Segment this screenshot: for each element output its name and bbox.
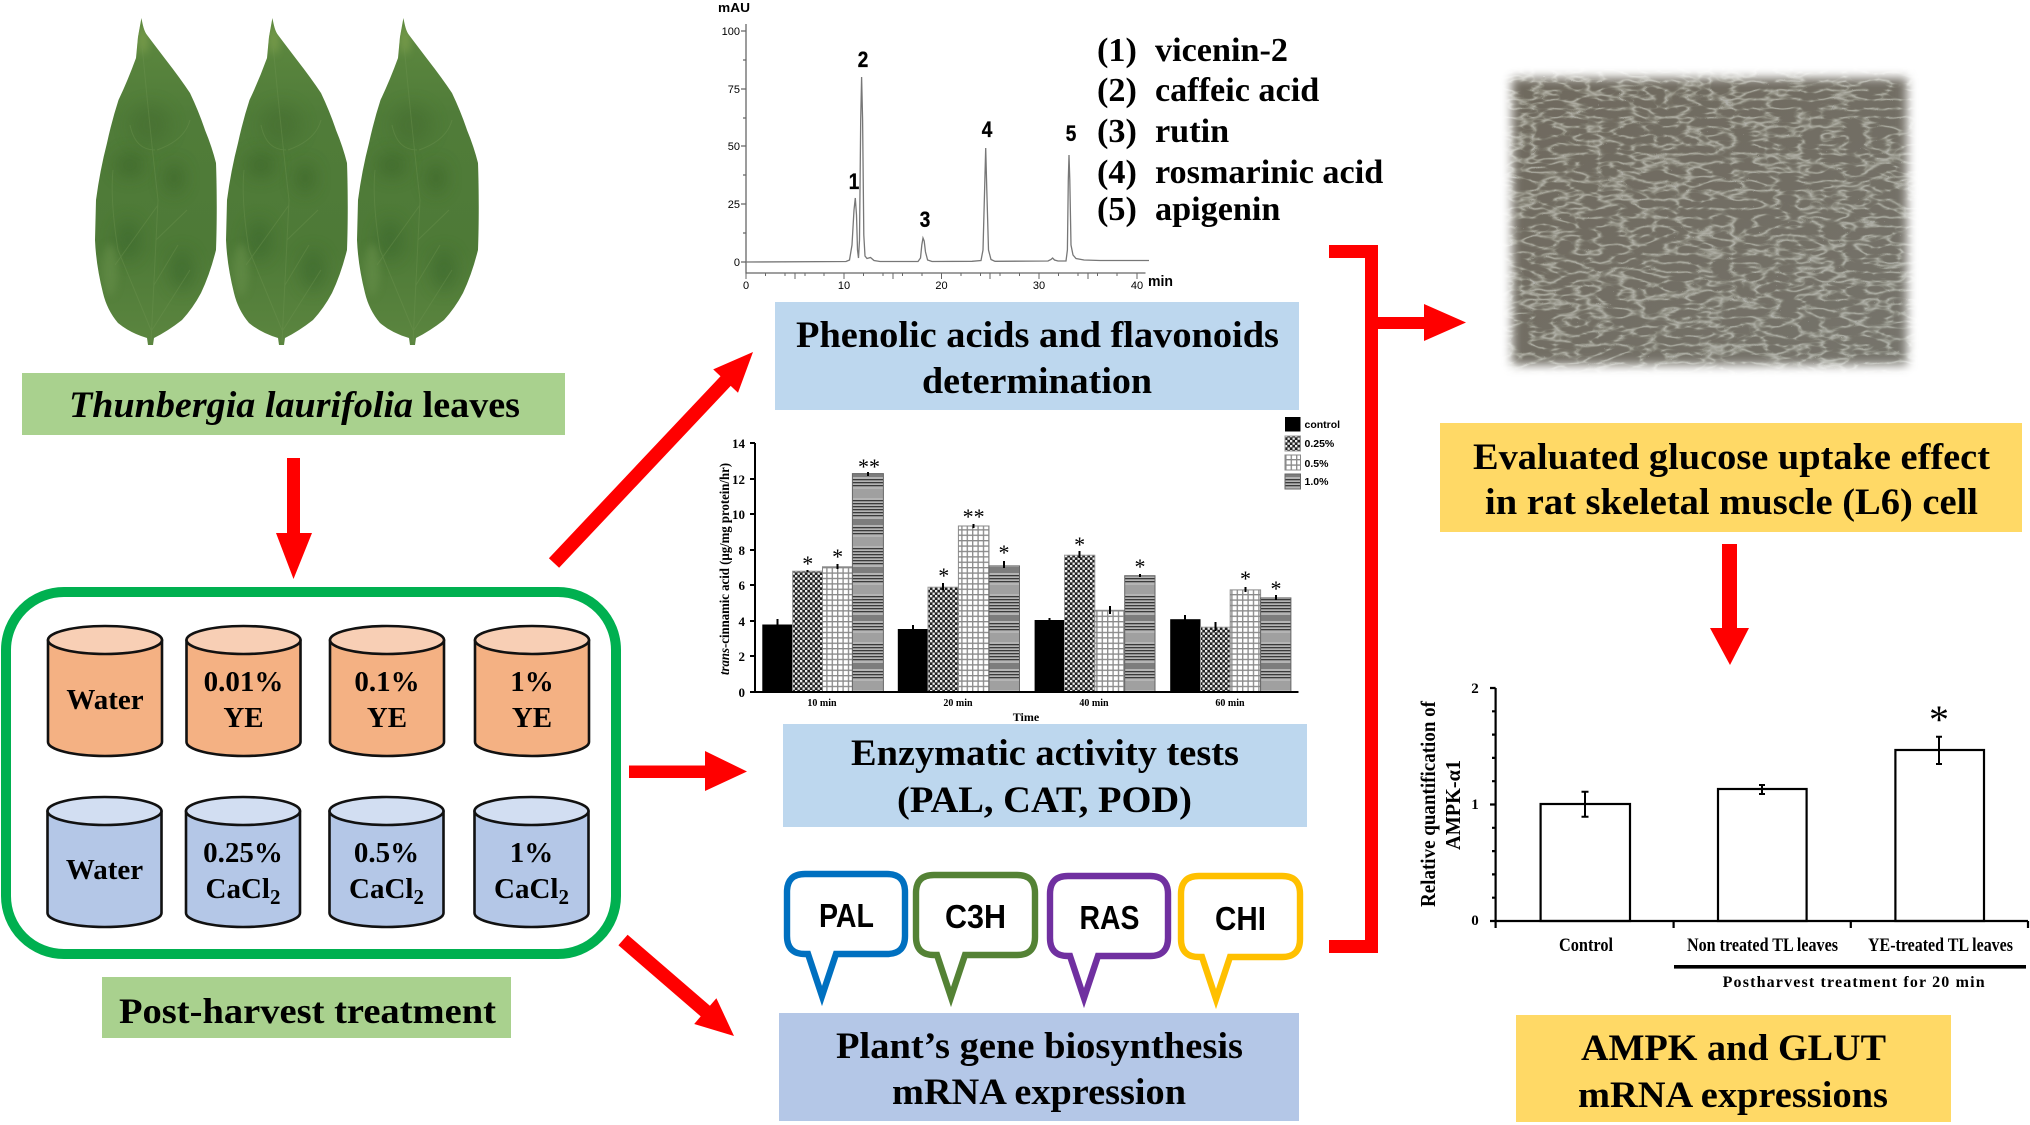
significance stars: * (998, 540, 1010, 565)
legend (1285, 417, 1340, 489)
y axis title: AMPK-α1 (1441, 760, 1465, 850)
container: water blue (48, 797, 162, 927)
x axis labels: Non treated TL leaves (1687, 935, 1838, 956)
chromatogram peak numbers (849, 48, 1076, 232)
container: 1% CaCl2: 1% (510, 837, 553, 869)
x axis labels: 40 min (1079, 698, 1109, 709)
leaves photo (90, 15, 482, 350)
y axis numbers: 14 (732, 436, 746, 451)
x axis labels (807, 698, 1245, 709)
error bars (1582, 737, 1942, 817)
compound list: (3) (1097, 113, 1137, 150)
compound list: vicenin-2 (1155, 32, 1288, 69)
bars (1541, 750, 1984, 921)
x axis title: Time (1013, 710, 1040, 724)
container: 0.01% YE: YE (223, 702, 264, 734)
label: plant gene biosynthesis mRNA expression (779, 1013, 1299, 1121)
y axis numbers: 6 (738, 578, 746, 593)
chromatogram axis labels: 20 (935, 280, 948, 292)
label: Thunbergia laurifolia leaves: Thunbergia laurifolia leaves (69, 385, 520, 426)
container: 1% YE: YE (512, 702, 552, 734)
speech bubble: PAL (787, 874, 905, 996)
x axis labels: 60 min (1215, 698, 1245, 709)
chromatogram axis labels: 75 (728, 84, 740, 96)
significance stars: * (832, 544, 843, 569)
y axis title: trans-cinnamic acid (µg/mg protein/hr) (718, 463, 733, 675)
significance stars: * (1134, 554, 1146, 579)
container: 1% CaCl2: CaCl (494, 873, 558, 905)
legend: 1.0% (1304, 476, 1329, 488)
chromatogram peak numbers: 5 (1066, 122, 1076, 146)
chromatogram peak numbers: 4 (982, 118, 993, 142)
label: evaluated glucose uptake (1440, 423, 2022, 532)
speech bubble: CHI: CHI (1215, 900, 1266, 937)
arrow: glucose uptake to AMPK chart (1710, 544, 1749, 665)
speech bubble: CHI (1181, 876, 1300, 999)
chromatogram axis labels: 100 (722, 26, 740, 38)
treatment group label: Postharvest treatment for 20 min (1723, 974, 1985, 991)
bracket: combining results (1329, 245, 1378, 953)
label: phenolic acids and flavonoids determination (775, 302, 1299, 410)
chromatogram peak numbers: 3 (920, 208, 930, 232)
significance stars (802, 454, 1282, 601)
label: AMPK and GLUT mRNA expressions (1516, 1015, 1951, 1122)
compound list: (4) (1097, 154, 1137, 191)
significance stars: * (938, 563, 949, 588)
chart: trans-cinnamic acid bar chart (718, 417, 1340, 724)
compound list: (5) (1097, 191, 1137, 228)
compound list: (1) (1097, 32, 1137, 69)
y axis numbers: 0 (738, 685, 745, 700)
label: enzymatic activity tests: (PAL, CAT, POD) (897, 780, 1192, 821)
0.5% bars (822, 526, 1261, 692)
significance stars: ** (858, 454, 880, 479)
container: 0.25% CaCl2 (186, 797, 300, 927)
compound list: apigenin (1155, 191, 1280, 228)
x axis labels: Control (1559, 935, 1613, 956)
arrow: bracket to cell image (1378, 304, 1466, 341)
arrow: treatment to gene biosynthesis (618, 935, 734, 1036)
label: AMPK and GLUT mRNA expressions: AMPK and GLUT (1581, 1028, 1886, 1069)
label: phenolic acids and flavonoids determination: determination (922, 361, 1152, 402)
label: phenolic acids and flavonoids determination: Phenolic acids and flavonoids (796, 315, 1279, 356)
significance stars: * (1240, 566, 1251, 591)
chromatogram axis labels: 10 (838, 280, 850, 292)
y axis numbers: 12 (732, 472, 745, 487)
error bars (778, 472, 1276, 631)
y axis numbers: 10 (732, 507, 745, 522)
container: 0.1% YE: 0.1% (354, 666, 420, 698)
axes (1490, 688, 2028, 928)
y axis title: Relative quantification of (1416, 700, 1440, 907)
chart: AMPK-alpha1 relative quantification (1416, 681, 2028, 991)
label: post-harvest treatment: Post-harvest treatment (119, 991, 496, 1031)
significance star: * (1929, 697, 1949, 742)
chromatogram axis labels: 30 (1033, 280, 1045, 292)
compound list: rosmarinic acid (1155, 154, 1383, 191)
legend: control (1304, 419, 1340, 431)
container: 0.5% CaCl2 (330, 797, 444, 927)
label: enzymatic activity tests: Enzymatic activity tests (851, 733, 1239, 774)
y axis numbers (1471, 681, 1479, 929)
label: AMPK and GLUT mRNA expressions: mRNA expressions (1578, 1075, 1888, 1116)
y axis numbers: 1 (1471, 797, 1479, 813)
significance stars: * (1270, 576, 1282, 601)
label: plant gene biosynthesis mRNA expression: Plant’s gene biosynthesis (836, 1026, 1243, 1067)
chromatogram axis labels: 40 (1131, 280, 1143, 292)
1.0% bars (852, 474, 1291, 692)
chromatogram axis labels: min (1148, 273, 1173, 290)
y axis numbers: 2 (738, 649, 745, 664)
chromatogram axis labels (718, 0, 1173, 292)
0.25% bars (793, 555, 1230, 692)
speech bubble: RAS (1050, 876, 1168, 998)
significance stars: * (802, 551, 813, 576)
label: post-harvest treatment (102, 977, 511, 1038)
chromatogram peak numbers: 1 (849, 170, 859, 194)
container: 0.01% YE (186, 626, 300, 756)
compound list: (2) (1097, 72, 1137, 109)
compound list: caffeic acid (1155, 72, 1319, 109)
label: plant gene biosynthesis mRNA expression: mRNA expression (892, 1072, 1186, 1113)
container: 0.25% CaCl2: CaCl (206, 873, 270, 905)
container: 0.5% CaCl2: 0.5% (354, 837, 419, 869)
arrow: treatment to phenolic (549, 352, 753, 568)
chromatogram axis labels: 0 (743, 280, 749, 292)
chromatogram axis labels: 0 (734, 257, 740, 269)
container: 0.5% CaCl2: CaCl (349, 873, 413, 905)
chromatogram axis labels: mAU (718, 0, 750, 15)
chart: HPLC chromatogram (718, 0, 1173, 292)
compound list: rutin (1155, 113, 1229, 150)
label: enzymatic activity tests (783, 724, 1307, 827)
y axis numbers (732, 436, 746, 700)
axes (750, 443, 1298, 692)
y axis numbers: 8 (738, 543, 746, 558)
arrow: treatment to enzymatic (629, 751, 747, 791)
speech bubble: RAS: RAS (1080, 899, 1140, 936)
container: water blue: Water (66, 854, 143, 886)
x axis labels: 10 min (807, 698, 837, 709)
legend: 0.25% (1304, 438, 1335, 450)
chromatogram peak numbers: 2 (858, 48, 868, 72)
x axis labels (1559, 935, 2013, 956)
chromatogram axis labels: 25 (728, 199, 740, 211)
container: 1% CaCl2: 2 (558, 885, 569, 909)
label: evaluated glucose uptake: Evaluated glucose uptake effect (1473, 437, 1991, 478)
speech bubble: PAL: PAL (819, 897, 874, 934)
container: 0.5% CaCl2: 2 (413, 885, 424, 909)
legend: 0.5% (1304, 458, 1329, 470)
speech bubble: C3H (916, 875, 1035, 997)
significance stars: ** (963, 504, 985, 529)
container: 1% CaCl2 (474, 797, 588, 927)
container: 0.25% CaCl2: 2 (270, 885, 280, 909)
treatment group rule (1674, 965, 2026, 969)
arrow: leaves to treatment (276, 458, 312, 579)
y axis numbers: 4 (738, 614, 746, 629)
container: water orange: Water (66, 684, 144, 716)
label: evaluated glucose uptake: in rat skeletal muscle (L6) cell (1485, 482, 1978, 523)
significance stars: * (1074, 532, 1085, 557)
speech bubble: C3H: C3H (945, 898, 1006, 935)
container: 0.1% YE (330, 626, 444, 756)
container: 0.25% CaCl2: 0.25% (203, 837, 283, 869)
compound list (1097, 32, 1383, 228)
y axis numbers: 0 (1471, 913, 1479, 929)
y axis numbers: 2 (1471, 681, 1479, 697)
x axis labels: 20 min (943, 698, 973, 709)
container: 1% YE (475, 626, 589, 756)
label: Thunbergia laurifolia leaves (22, 373, 565, 435)
panel: post-harvest treatment containers (6, 592, 616, 954)
container: 1% YE: 1% (510, 666, 554, 698)
control bars (762, 619, 1200, 692)
chromatogram axis labels: 50 (728, 141, 740, 153)
container: water orange (48, 626, 162, 756)
container: 0.01% YE: 0.01% (204, 666, 283, 698)
y axis title (1416, 700, 1465, 907)
image: L6 skeletal muscle cells micrograph (1504, 70, 1915, 372)
container: 0.1% YE: YE (367, 702, 407, 734)
